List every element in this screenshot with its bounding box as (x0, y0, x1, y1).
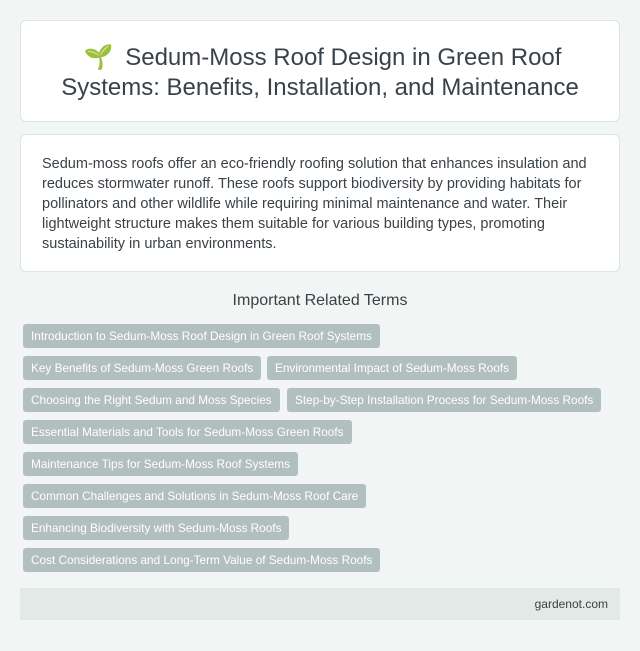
tag (23, 356, 261, 380)
footer text: gardenot.com (535, 597, 608, 611)
tag: Common Challenges and Solutions in Sedum-Moss Roof Care (31, 489, 358, 503)
tag (23, 484, 366, 508)
title: Sedum-Moss Roof Design in Green Roof Systems: Benefits, Installation, and Maintenance (61, 44, 579, 101)
footer (20, 588, 620, 620)
tag (23, 388, 280, 412)
tag: Enhancing Biodiversity with Sedum-Moss Roofs (31, 521, 281, 535)
tag: Maintenance Tips for Sedum-Moss Roof Systems (31, 457, 290, 471)
tags panel (23, 324, 601, 572)
tag (23, 420, 352, 444)
tag (23, 548, 380, 572)
section heading: Important Related Terms (233, 292, 407, 309)
icon: sprout: 🌱 (84, 44, 114, 71)
tag: Choosing the Right Sedum and Moss Species (31, 393, 272, 407)
description text: Sedum-moss roofs offer an eco-friendly roofing solution that enhances insulation and reduces stormwater runoff. These roofs support biodiversity by providing habitats for pollinators and other wildlife while requiring minimal maintenance and water. Their lightweight structure makes them suitable for various building types, promoting sustainability in urban environments. (42, 156, 587, 252)
tag (23, 516, 289, 540)
tag (267, 356, 517, 380)
tag (287, 388, 601, 412)
tag: Key Benefits of Sedum-Moss Green Roofs (31, 361, 253, 375)
tag: Environmental Impact of Sedum-Moss Roofs (275, 361, 509, 375)
tag: Introduction to Sedum-Moss Roof Design in Green Roof Systems (31, 329, 372, 343)
tag: Essential Materials and Tools for Sedum-Moss Green Roofs (31, 425, 344, 439)
tag (23, 324, 380, 348)
tag (23, 452, 298, 476)
description card (20, 134, 620, 272)
tag: Cost Considerations and Long-Term Value of Sedum-Moss Roofs (31, 553, 372, 567)
tag: Step-by-Step Installation Process for Sedum-Moss Roofs (295, 393, 593, 407)
title card (20, 20, 620, 122)
